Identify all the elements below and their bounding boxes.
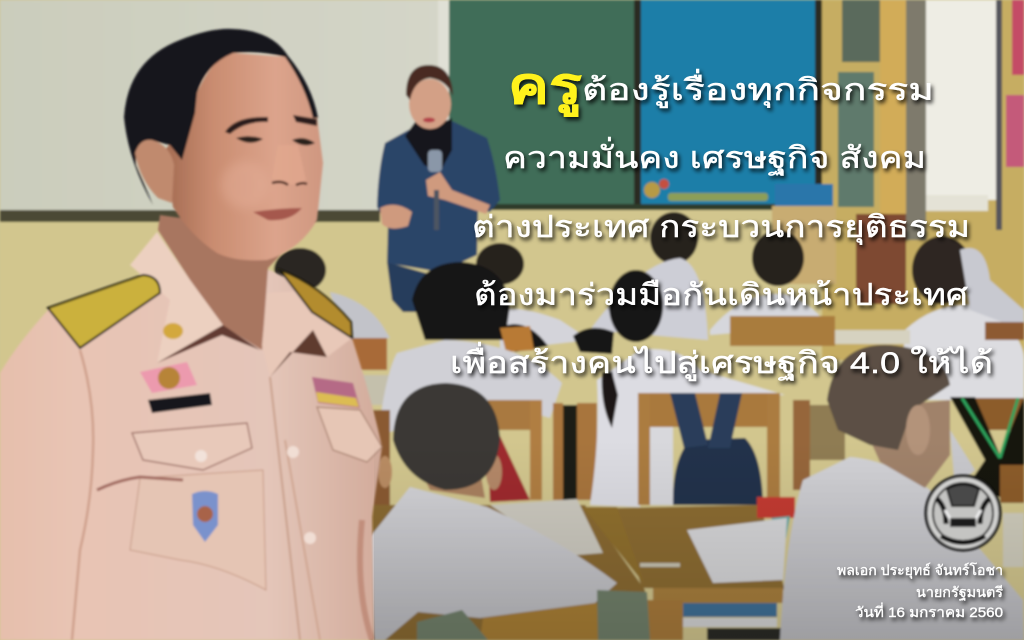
line 1: ต้องรู้เรื่องทุกกิจกรรม	[582, 69, 934, 109]
line 4: ต้องมาร่วมมือกันเดินหน้าประเทศ	[474, 279, 968, 312]
face	[409, 79, 451, 129]
highlighted word: teacher: ครู	[508, 58, 582, 117]
front student left	[370, 383, 617, 640]
icon: Royal Thai Government emblem seal	[926, 476, 1000, 550]
eyes	[236, 136, 315, 145]
nostrils	[272, 182, 307, 185]
main figure: Prime Minister in uniform	[0, 29, 382, 640]
bottom darkening of photo	[374, 440, 1024, 640]
right pocket flap	[317, 407, 382, 462]
boxes on shelf	[775, 184, 833, 206]
eyebrows	[225, 115, 317, 134]
uniform shirt	[0, 232, 382, 640]
line 2: ความมั่นคง เศรษฐกิจ สังคม	[503, 137, 926, 176]
paper	[687, 518, 787, 583]
ponytail	[602, 372, 618, 428]
line 3: ต่างประเทศ กระบวนการยุติธรรม	[472, 211, 970, 246]
headline quote	[450, 58, 993, 381]
pink ribbon badge	[140, 362, 197, 393]
placket	[270, 377, 300, 640]
forearm	[426, 172, 490, 214]
attribution	[837, 562, 1003, 620]
rear wooden furniture	[372, 403, 597, 510]
microphone	[428, 150, 442, 172]
date: วันที่ 16 มกราคม 2560	[855, 603, 1003, 620]
green chalkboard	[449, 0, 635, 206]
chair front	[488, 393, 1024, 505]
middle student shirt	[378, 340, 562, 437]
black backpack with green straps	[950, 397, 1024, 497]
nose	[272, 145, 306, 185]
epaulette right	[280, 270, 352, 338]
left pocket	[130, 470, 266, 590]
medal ribbons right	[312, 377, 360, 408]
hair	[124, 29, 318, 205]
teacher	[377, 65, 500, 312]
unit patch	[192, 491, 218, 542]
neck	[158, 215, 300, 350]
book	[490, 499, 603, 556]
name tag	[148, 393, 212, 413]
mouth	[253, 208, 302, 220]
fist	[380, 205, 412, 229]
ear	[135, 140, 174, 203]
dark girl hair and arms	[412, 262, 663, 354]
epaulette left	[48, 275, 160, 348]
head	[165, 53, 323, 260]
backpack	[673, 438, 763, 505]
foreground chair	[480, 603, 600, 640]
jacket	[377, 120, 500, 272]
front student right	[780, 345, 1024, 640]
scarf	[405, 118, 452, 172]
whiteboard	[0, 0, 440, 210]
collar pin	[163, 323, 183, 339]
back row students	[274, 212, 1024, 400]
buttons	[287, 446, 299, 458]
right wall with posters	[822, 0, 1024, 360]
board decorations	[644, 179, 768, 201]
legs	[387, 262, 450, 312]
red bag	[487, 432, 530, 502]
sleeve seam	[72, 350, 93, 640]
left pocket flap	[132, 423, 252, 470]
position: นายกรัฐมนตรี	[916, 584, 1003, 601]
blue board	[641, 0, 816, 204]
wooden chairs and desks back	[345, 316, 1024, 405]
name: พลเอก ประยุทธ์ จันทร์โอชา	[837, 562, 1003, 579]
highlight cheek	[221, 161, 269, 209]
girl in white	[590, 349, 785, 507]
collar	[130, 232, 223, 363]
line 5: เพื่อสร้างคนไปสู่เศรษฐกิจ 4.0 ให้ได้	[450, 342, 993, 381]
front desks	[370, 497, 795, 640]
